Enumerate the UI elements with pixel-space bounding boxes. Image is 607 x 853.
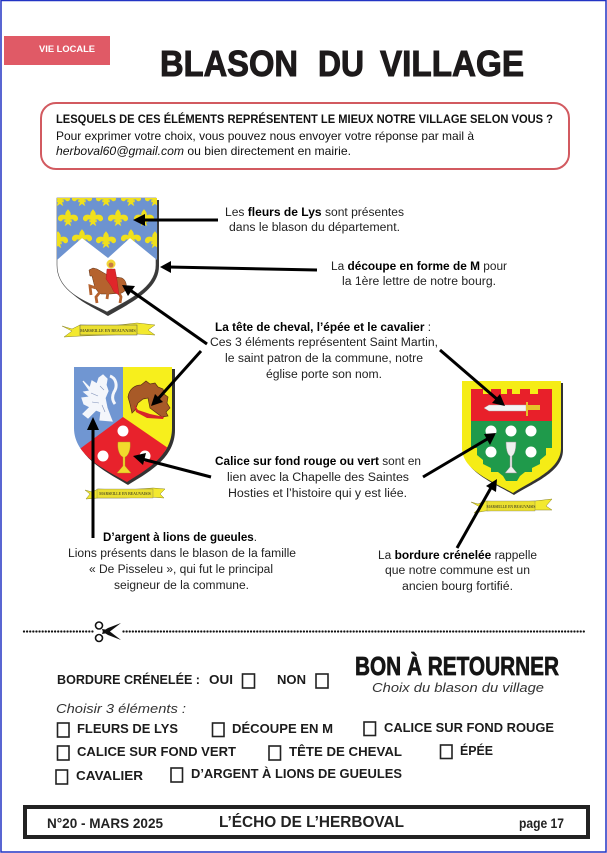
footer bar: N°20 - MARS 2025 <box>47 815 163 831</box>
title: BLASON <box>160 43 298 84</box>
text: calice: Calice sur fond rouge ou vert sont en <box>215 456 421 468</box>
form: checkbox options: CAVALIER <box>76 768 144 783</box>
form: bordure crénelée: NON <box>277 672 306 687</box>
form: checkbox options: DÉCOUPE EN M <box>232 721 333 736</box>
lion <box>82 375 116 421</box>
green field <box>471 421 552 481</box>
text: calice <box>215 456 421 500</box>
cut line with scissors <box>24 620 585 642</box>
text: lions: seigneur de la commune. <box>114 580 249 592</box>
horse head <box>128 381 170 419</box>
text: lions: Lions présents dans le blason de la famille <box>68 548 296 560</box>
text: tête de cheval: Ces 3 éléments représentent Saint Martin, <box>210 337 438 349</box>
text: bordure crénelée: ancien bourg fortifié. <box>402 581 513 593</box>
title: VILLAGE <box>380 43 524 84</box>
arrow: tête de cheval <box>151 351 201 406</box>
footer bar <box>25 807 588 837</box>
text: lions: « De Pisseleu », qui fut le principal <box>89 564 273 576</box>
chalice <box>117 442 131 473</box>
text: tête de cheval: église porte son nom. <box>266 369 382 381</box>
coat of arms 2: lion, horse head, chalice <box>74 367 176 490</box>
text: bordure crénelée: La bordure crénelée rappelle <box>378 550 537 562</box>
form: checkbox options: TÊTE DE CHEVAL <box>289 744 402 759</box>
sword <box>484 402 540 416</box>
banner 3 <box>471 499 552 513</box>
form: checkbox options: ÉPÉE <box>460 743 493 758</box>
arrow: calice rouge <box>133 453 211 477</box>
text: fleurs de lys: dans le blason du département. <box>229 222 400 234</box>
title <box>160 43 524 84</box>
form: checkbox options: CALICE SUR FOND ROUGE <box>384 720 554 735</box>
text: bordure crénelée <box>378 550 537 593</box>
form: bordure crénelée: BORDURE CRÉNELÉE : <box>57 672 200 687</box>
section tag: vie locale <box>4 36 110 65</box>
silver chalice <box>505 442 517 473</box>
red battlement <box>471 389 552 421</box>
banner 2 <box>85 488 165 499</box>
text: lions <box>68 532 296 592</box>
title: DU <box>318 43 364 84</box>
arrow: cavalier <box>122 285 207 344</box>
intro callout: Pour exprimer votre choix, vous pouvez nous envoyer votre réponse par mail à <box>56 129 474 143</box>
form: checkbox options: FLEURS DE LYS <box>77 721 178 736</box>
text: fleurs de lys <box>225 207 404 234</box>
form: checkbox options: D’ARGENT À LIONS DE GUEULES <box>191 766 402 781</box>
text: fleurs de lys: Les fleurs de Lys sont présentes <box>225 207 404 219</box>
text: calice: lien avec la Chapelle des Saintes <box>227 472 409 484</box>
intro callout <box>41 103 569 169</box>
form: checkbox options <box>56 720 554 784</box>
text: tête de cheval: le saint patron de la commune, notre <box>225 353 423 365</box>
heading: bon à retourner <box>355 651 559 695</box>
form: bordure crénelée <box>57 672 328 688</box>
intro callout: LESQUELS DE CES ÉLÉMENTS REPRÉSENTENT LE MIEUX NOTRE VILLAGE SELON VOUS ? <box>56 111 553 126</box>
banner 3: MARSEILLE EN BEAUVAISIS <box>487 505 535 509</box>
text: tête de cheval <box>210 322 438 381</box>
banner 1 <box>62 323 155 337</box>
coat of arms 1: lys and rider <box>56 198 159 316</box>
arrow: lion <box>87 417 99 538</box>
text: bordure crénelée: que notre commune est un <box>385 565 530 577</box>
arrow: bordure <box>457 479 497 548</box>
text: découpe en M <box>331 261 507 288</box>
arrow: épée <box>440 350 505 406</box>
section tag: vie locale: VIE LOCALE <box>39 44 95 55</box>
text: lions: D’argent à lions de gueules. <box>103 532 257 544</box>
heading: bon à retourner: Choix du blason du village <box>372 681 544 695</box>
footer bar: L’ÉCHO DE L’HERBOVAL <box>219 812 404 831</box>
form: checkbox options: CALICE SUR FOND VERT <box>77 744 236 759</box>
text: calice: Hosties et l’histoire qui y est liée. <box>228 488 407 500</box>
form instruction: Choisir 3 éléments : <box>56 702 186 716</box>
banner 1: MARSEILLE EN BEAUVAISIS <box>80 328 136 333</box>
banner 2: MARSEILLE EN BEAUVAISIS <box>99 492 151 496</box>
text: découpe en M: La découpe en forme de M pour <box>331 261 507 273</box>
arrow: découpe <box>160 261 317 273</box>
footer bar: page 17 <box>519 815 564 831</box>
coat of arms 3: battlement, sword, chalice <box>462 381 563 495</box>
heading: bon à retourner: BON À RETOURNER <box>355 651 559 681</box>
arrow: calice vert <box>423 433 496 477</box>
form: bordure crénelée: OUI <box>209 672 233 687</box>
text: tête de cheval: La tête de cheval, l’épée et le cavalier : <box>215 322 431 334</box>
horse and rider <box>89 260 126 303</box>
arrow: fleurs de lys <box>133 214 218 226</box>
text: découpe en M: la 1ère lettre de notre bourg. <box>342 276 496 288</box>
intro callout: herboval60@gmail.com ou bien directement en mairie. <box>56 144 351 158</box>
